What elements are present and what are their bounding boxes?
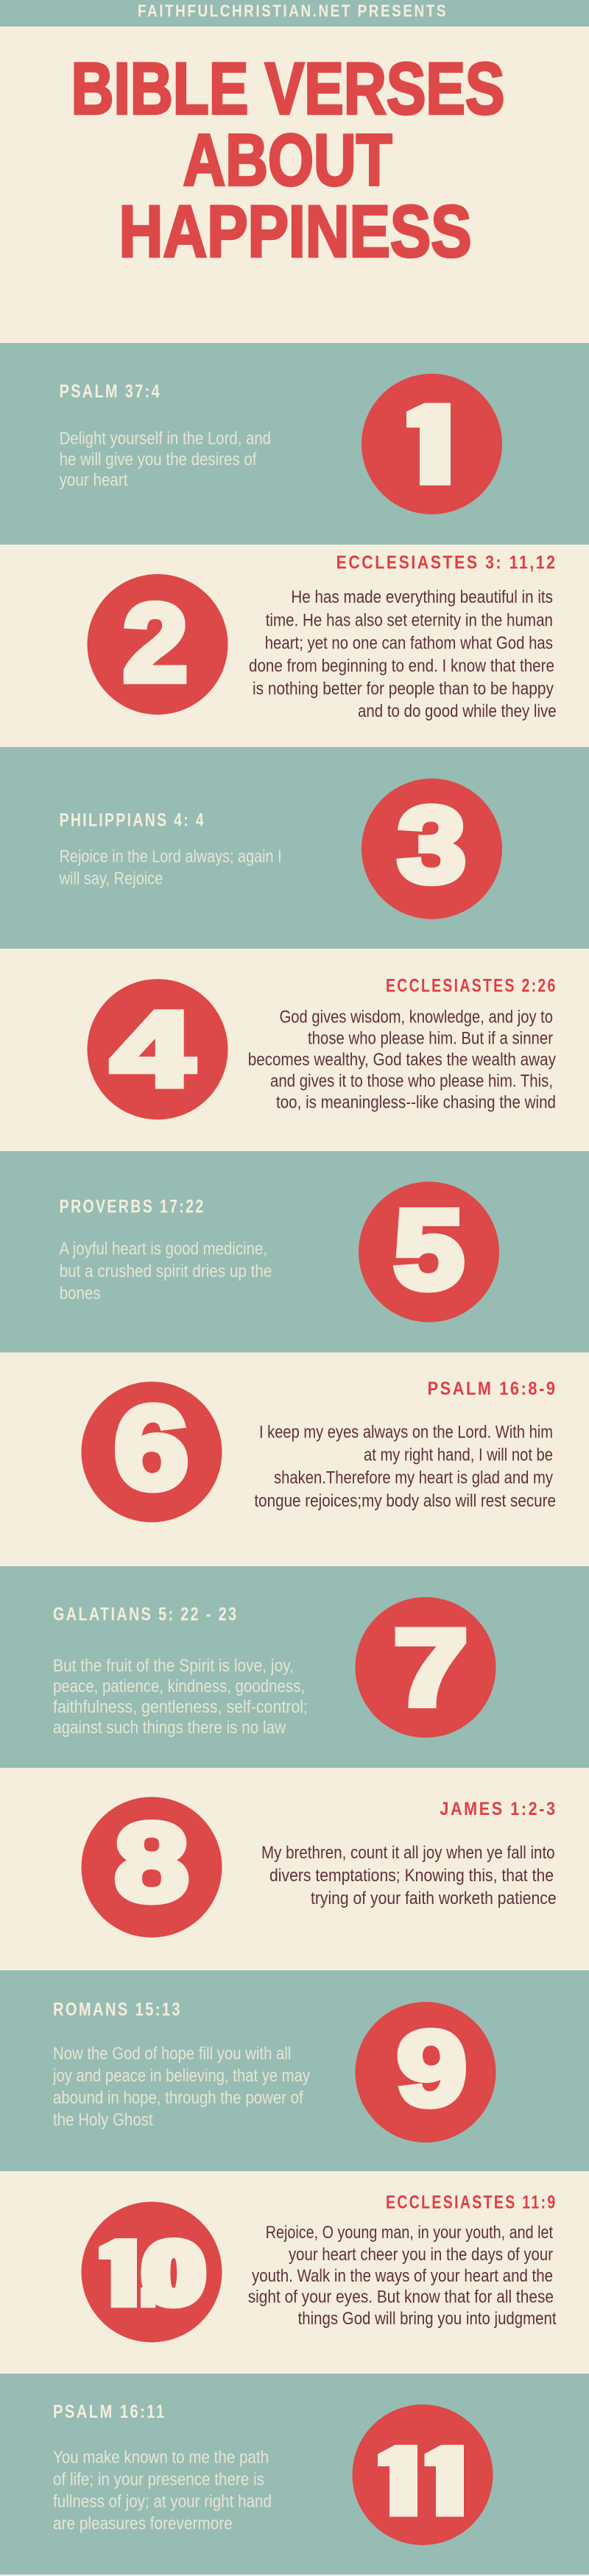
heading: Galatians 5: 22 - 23: GALATIANS 5: 22 - 23 — [53, 1604, 239, 1624]
verse text 11: of life; in your presence there is — [53, 2470, 264, 2490]
number badge 7 — [355, 1597, 496, 1738]
verse text 10 — [248, 2223, 557, 2329]
verse text 3: will say, Rejoice — [59, 868, 163, 888]
heading: Psalm 37:4: PSALM 37:4 — [60, 381, 161, 402]
number badge 1 — [361, 374, 502, 514]
verse text 5: A joyful heart is good medicine, — [60, 1239, 267, 1259]
verse text 9 — [52, 2044, 311, 2130]
heading: Psalm 16:8-9: PSALM 16:8-9 — [428, 1379, 557, 1399]
panel: verse 11 — [0, 2374, 589, 2575]
verse text 2: and to do good while they live — [358, 701, 557, 721]
verse text 7: faithfulness, gentleness, self-control; — [53, 1697, 308, 1717]
verse text 7: peace, patience, kindness, goodness, — [53, 1677, 305, 1696]
panel: verse 2 — [0, 545, 589, 747]
verse text 9: joy and peace in believing, that ye may — [52, 2066, 311, 2086]
panel: verse 1 — [0, 343, 589, 545]
number badge 11 — [352, 2405, 493, 2545]
title — [71, 47, 505, 272]
title: HAPPINESS — [119, 190, 471, 272]
number badge 2: 2 — [123, 581, 188, 704]
verse text 9: Now the God of hope fill you with all — [53, 2044, 291, 2064]
number badge 5 — [359, 1182, 499, 1322]
number badge 11: 11 — [373, 2435, 476, 2527]
verse text 11 — [53, 2448, 272, 2534]
number badge 2 — [87, 574, 228, 715]
number badge 6 — [81, 1381, 222, 1522]
heading: James 1:2-3: JAMES 1:2-3 — [440, 1799, 557, 1819]
number badge 1: 1 — [395, 389, 469, 499]
heading: Ecclesiastes 3: 11,12: ECCLESIASTES 3: 11,12 — [336, 552, 557, 573]
panel: verse 7 — [0, 1566, 589, 1768]
heading: Proverbs 17:22: PROVERBS 17:22 — [60, 1197, 205, 1217]
verse text 7: against such things there is no law — [53, 1718, 286, 1738]
title: ABOUT — [183, 119, 392, 200]
number badge 3 — [361, 779, 502, 919]
number badge 8: 8 — [115, 1800, 188, 1924]
verse text 11: You make known to me the path — [53, 2448, 269, 2468]
verse text 1: he will give you the desires of — [60, 450, 257, 470]
number badge 6: 6 — [114, 1381, 188, 1513]
verse text 5: bones — [60, 1284, 101, 1303]
top banner: FAITHFULCHRISTIAN.NET PRESENTS — [138, 1, 448, 21]
verse text 4 — [248, 1008, 557, 1112]
panel: verse 3 — [0, 747, 589, 949]
verse text 7 — [53, 1656, 308, 1738]
verse text 11: are pleasures forevermore — [53, 2514, 233, 2534]
verse text 8: divers temptations; Knowing this, that the — [269, 1866, 554, 1886]
verse text 11: fullness of joy; at your right hand — [53, 2492, 272, 2512]
number badge 9 — [355, 2002, 496, 2142]
heading: Philippians 4: 4: PHILIPPIANS 4: 4 — [60, 810, 205, 830]
panel: verse 10 — [81, 2195, 557, 2342]
top banner — [0, 0, 589, 26]
number badge 5: 5 — [394, 1187, 464, 1312]
heading: Psalm 16:11: PSALM 16:11 — [53, 2402, 166, 2422]
number badge 4: 4 — [111, 990, 194, 1108]
verse text 8: trying of your faith worketh patience — [311, 1889, 557, 1908]
number badge 7: 7 — [394, 1607, 468, 1727]
number badge 4 — [87, 979, 228, 1119]
number badge 3: 3 — [398, 785, 466, 905]
panel: verse 4 — [0, 949, 589, 1151]
verse text 3 — [59, 846, 282, 888]
verse text 5: but a crushed spirit dries up the — [60, 1262, 272, 1281]
verse text 8 — [261, 1843, 557, 1908]
verse text 7: But the fruit of the Spirit is love, joy, — [53, 1656, 294, 1676]
verse text 6: at my right hand, I will not be — [364, 1446, 553, 1465]
number badge 10: 10 — [92, 2226, 203, 2320]
verse text 5 — [60, 1239, 272, 1303]
heading: Romans 15:13: ROMANS 15:13 — [53, 2000, 182, 2020]
verse text 3: Rejoice in the Lord always; again I — [60, 846, 282, 866]
verse text 2 — [249, 587, 557, 721]
panel: verse 9 — [0, 1970, 589, 2171]
number badge 8 — [81, 1797, 222, 1937]
verse text 1: your heart — [60, 470, 128, 490]
verse text 1: Delight yourself in the Lord, and — [60, 429, 271, 449]
panel: verse 8 — [0, 1768, 589, 1970]
verse text 6 — [254, 1423, 556, 1511]
verse text 9: abound in hope, through the power of — [53, 2088, 303, 2108]
number badge 9: 9 — [397, 2009, 467, 2128]
number badge 10 — [81, 2202, 222, 2342]
verse text 1 — [60, 429, 271, 490]
panel: verse 6 — [0, 1353, 589, 1566]
panel: verse 5 — [0, 1151, 589, 1353]
verse text 9: the Holy Ghost — [53, 2110, 153, 2130]
